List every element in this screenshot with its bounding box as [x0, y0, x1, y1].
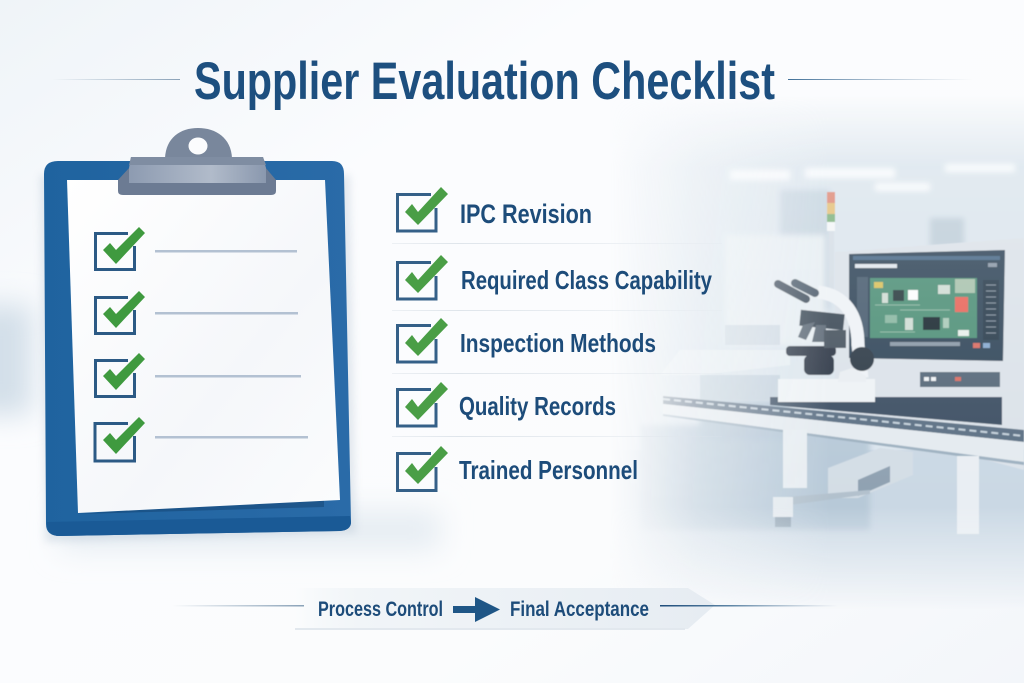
clip [118, 128, 276, 195]
bottom banner [295, 588, 715, 630]
circuit board [870, 278, 977, 338]
signal tower [826, 192, 836, 232]
list dividers [392, 243, 722, 437]
control panel [920, 372, 1000, 387]
bottom rule right [660, 605, 838, 606]
label: Final Acceptance: Final Acceptance [510, 598, 649, 621]
checklist item: Inspection Methods [398, 318, 656, 362]
checklist item: IPC Revision: IPC Revision [460, 199, 592, 229]
checklist item: Inspection Methods: Inspection Methods [460, 328, 656, 358]
conveyor [663, 396, 1024, 465]
monitor [849, 250, 1005, 361]
paper sheet [67, 180, 340, 513]
checklist item: Trained Personnel [398, 446, 638, 490]
paper line 4 [155, 436, 308, 438]
clipboard shadow [40, 175, 356, 542]
linear actuator box [828, 448, 913, 498]
paper line 2 [155, 312, 298, 314]
bottom rule left [172, 605, 304, 606]
paper checkbox 2 [96, 291, 145, 334]
title rule right [788, 79, 973, 80]
paper checkbox 1 [96, 227, 145, 270]
checklist item: Trained Personnel: Trained Personnel [459, 455, 638, 485]
label: Process Control: Process Control [318, 598, 443, 621]
floor [645, 450, 1024, 592]
clipboard [40, 128, 356, 542]
arrow [453, 597, 500, 622]
clipboard board [44, 161, 351, 536]
factory scene background [635, 119, 1024, 592]
paper line 1 [155, 250, 297, 252]
title rule left [52, 79, 180, 80]
machine opening [770, 397, 1002, 425]
lower frame [794, 490, 870, 504]
paper checkbox 4 [95, 417, 145, 461]
paper shadow [78, 496, 324, 514]
left background haze [0, 305, 440, 550]
checklist item: Quality Records [398, 382, 616, 426]
checklist item: Required Class Capability [398, 255, 712, 299]
microscope [778, 283, 875, 402]
checklist item: IPC Revision [398, 187, 592, 231]
machine body [930, 242, 1024, 470]
paper checkbox 3 [96, 353, 145, 396]
paper line 3 [155, 375, 301, 378]
checklist item: Required Class Capability: Required Class Capability [461, 265, 712, 295]
checklist item: Quality Records: Quality Records [459, 391, 616, 421]
conveyor legs [783, 430, 807, 488]
room wall and ceiling [654, 119, 1024, 450]
back bench [780, 351, 789, 365]
title: Supplier Evaluation Checklist [194, 52, 775, 111]
